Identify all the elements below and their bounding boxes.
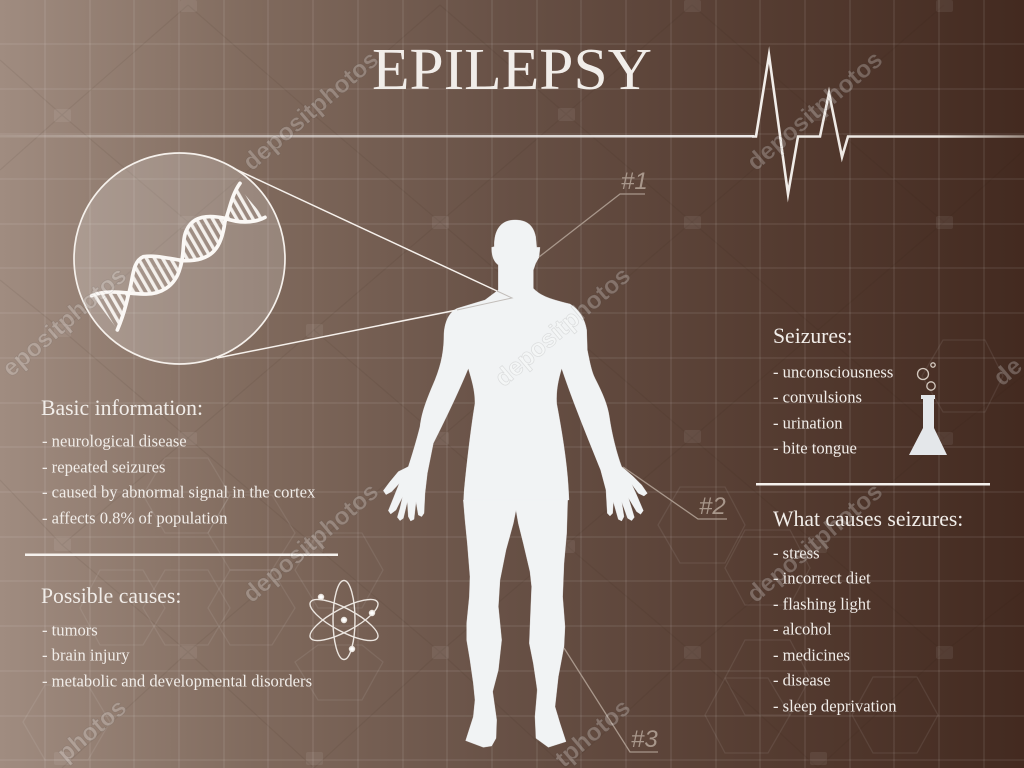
panel: what causes seizures: - disease	[773, 670, 831, 690]
callout: #3	[564, 648, 658, 753]
panel: what causes seizures: - flashing light	[773, 594, 871, 614]
panel: what causes seizures: - sleep deprivation	[773, 696, 897, 716]
legs	[463, 500, 568, 747]
panel: what causes seizures: - stress	[773, 544, 820, 562]
watermarks: photos	[52, 694, 132, 768]
panel: what causes seizures: What causes seizures:	[773, 507, 963, 531]
panel: seizures: - convulsions	[773, 388, 862, 406]
callout: #2: #2	[699, 493, 726, 520]
panel: what causes seizures: - incorrect diet	[773, 568, 871, 588]
panel: basic information: Basic information:	[41, 396, 203, 420]
panel: possible causes	[41, 584, 312, 690]
watermarks: depositphotos	[742, 46, 888, 176]
watermarks: depositphotos	[490, 262, 636, 392]
callout: #2	[623, 467, 727, 520]
panel: basic information	[41, 396, 316, 528]
panel: what causes seizures: - alcohol	[773, 620, 832, 638]
callout: #1	[539, 168, 648, 257]
panel: seizures: Seizures:	[773, 324, 852, 348]
magnifier circle	[74, 153, 285, 364]
panel: seizures	[773, 324, 893, 458]
title: EPILEPSY	[372, 36, 652, 102]
dna magnifier	[74, 153, 497, 364]
panel: what causes seizures: - medicines	[773, 646, 850, 664]
watermarks: depositphotos	[238, 478, 384, 608]
panel: what causes seizures	[773, 507, 963, 716]
zoom lines	[217, 168, 497, 358]
upper body	[383, 220, 647, 521]
panel: seizures: - urination	[773, 414, 843, 432]
body silhouette	[383, 220, 647, 747]
watermarks: depositphotos	[742, 478, 888, 608]
icon: flask	[909, 363, 947, 455]
panel: possible causes: - brain injury	[42, 646, 130, 664]
panel: possible causes: - metabolic and developmental disorders	[42, 672, 312, 690]
panel: possible causes: - tumors	[42, 620, 98, 640]
icon: atom	[305, 580, 383, 660]
heartbeat line	[0, 55, 1024, 194]
panel: basic information: - neurological disease	[42, 432, 187, 450]
callout: #3: #3	[631, 726, 658, 753]
panel: seizures: - bite tongue	[773, 438, 857, 458]
watermarks: depositphotos	[238, 46, 384, 176]
panel: basic information: - repeated seizures	[42, 458, 165, 476]
panel: possible causes: Possible causes:	[41, 584, 181, 608]
panel: basic information: - caused by abnormal signal in the cortex	[42, 482, 316, 502]
watermarks: epositphotos	[0, 262, 132, 382]
icon: dna helix	[92, 183, 265, 330]
panel: basic information: - affects 0.8% of population	[42, 508, 228, 528]
callout: #1: #1	[621, 168, 648, 195]
panel: seizures: - unconsciousness	[773, 362, 893, 382]
